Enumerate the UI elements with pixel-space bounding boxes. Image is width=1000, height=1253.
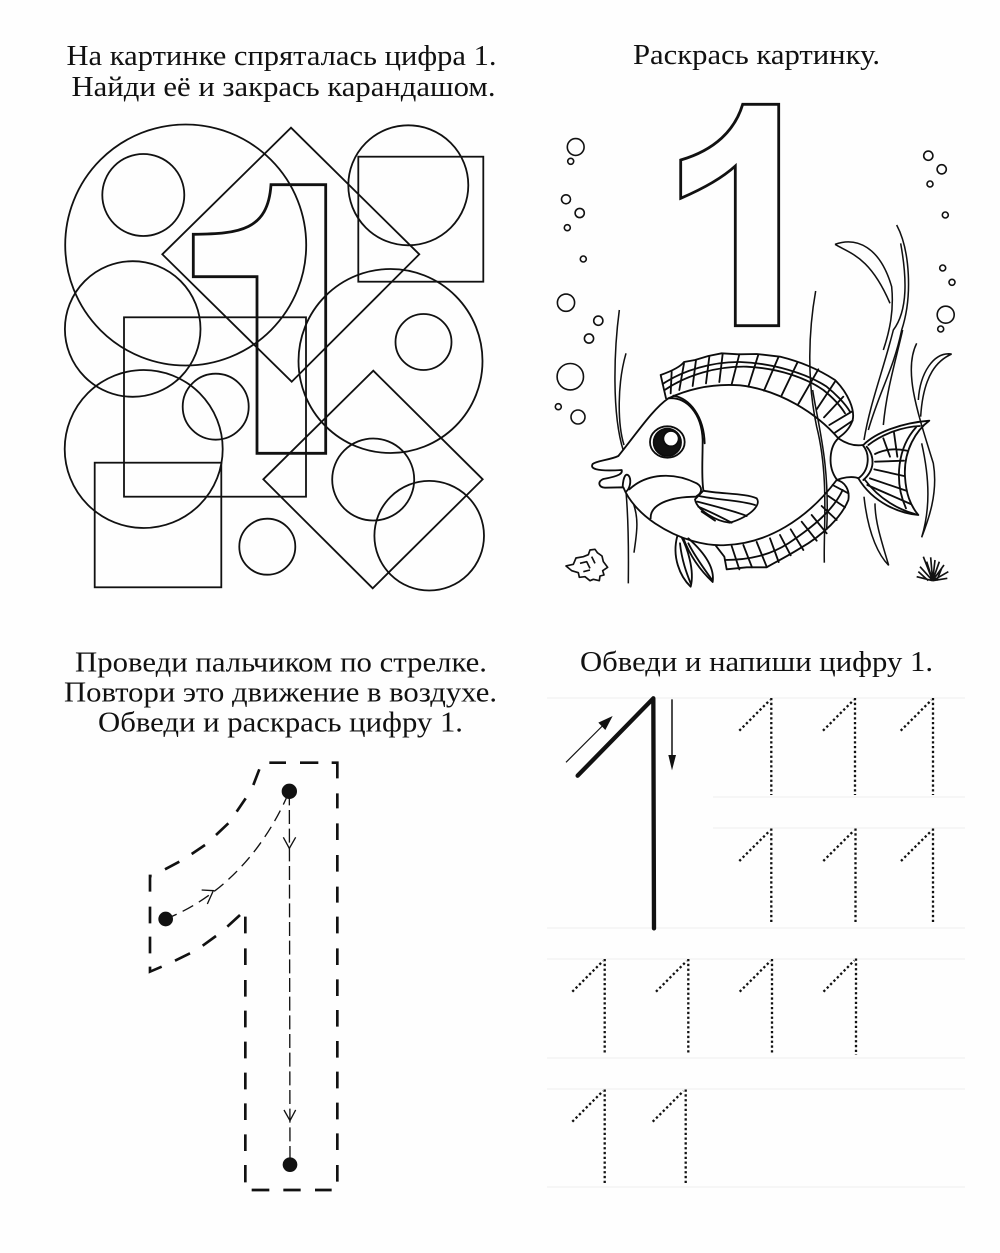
heading: find the digit: Найди её и закрась карандашом. xyxy=(72,71,496,103)
dotted digits row 1 xyxy=(739,698,933,795)
tail xyxy=(858,421,929,515)
pectoral fin xyxy=(695,491,758,523)
bubbles xyxy=(555,139,955,424)
heading: trace with a finger: Повтори это движение в воздухе. xyxy=(64,676,497,708)
fish xyxy=(592,353,929,587)
chart: overlapping shapes hiding digit 1 xyxy=(65,124,484,590)
dorsal fin xyxy=(661,353,853,437)
heading: trace with a finger: Проведи пальчиком по стрелке. xyxy=(75,646,487,678)
panel: trace with a finger xyxy=(64,646,497,1190)
dotted digits row 2 xyxy=(739,828,933,924)
seaweed in front of the fish xyxy=(810,291,827,563)
dashed digit 1 outline xyxy=(150,763,337,1190)
heading: colour the picture: Раскрась картинку. xyxy=(633,39,880,71)
heading: trace with a finger xyxy=(64,646,497,738)
dotted digits row 3 xyxy=(572,958,856,1055)
seaweed behind the fish xyxy=(615,225,952,583)
fish body outline xyxy=(592,385,868,545)
eye xyxy=(650,426,685,458)
dotted digits row 4 xyxy=(572,1090,686,1185)
panel: colour the picture xyxy=(555,39,955,587)
arrow: upstroke xyxy=(566,716,613,762)
large outlined digit 1 xyxy=(681,104,779,326)
head and gill xyxy=(668,398,703,490)
arrow: downstroke xyxy=(668,699,676,770)
heading: trace and write: Обведи и напиши цифру 1. xyxy=(580,646,933,678)
panel: trace and write xyxy=(547,646,965,1187)
coral xyxy=(566,549,608,581)
thin guide path with arrows and dots xyxy=(158,784,297,1172)
heading: find the digit: На картинке спряталась цифра 1. xyxy=(66,40,496,72)
example digit 1 with arrows xyxy=(566,698,676,928)
ventral fin xyxy=(716,480,849,569)
grass tuft xyxy=(917,557,948,581)
heading: trace with a finger: Обведи и раскрась цифру 1. xyxy=(98,706,463,738)
bottom fin xyxy=(676,536,692,587)
heading: find the digit xyxy=(66,40,496,103)
panel: find the hidden digit xyxy=(65,40,496,590)
